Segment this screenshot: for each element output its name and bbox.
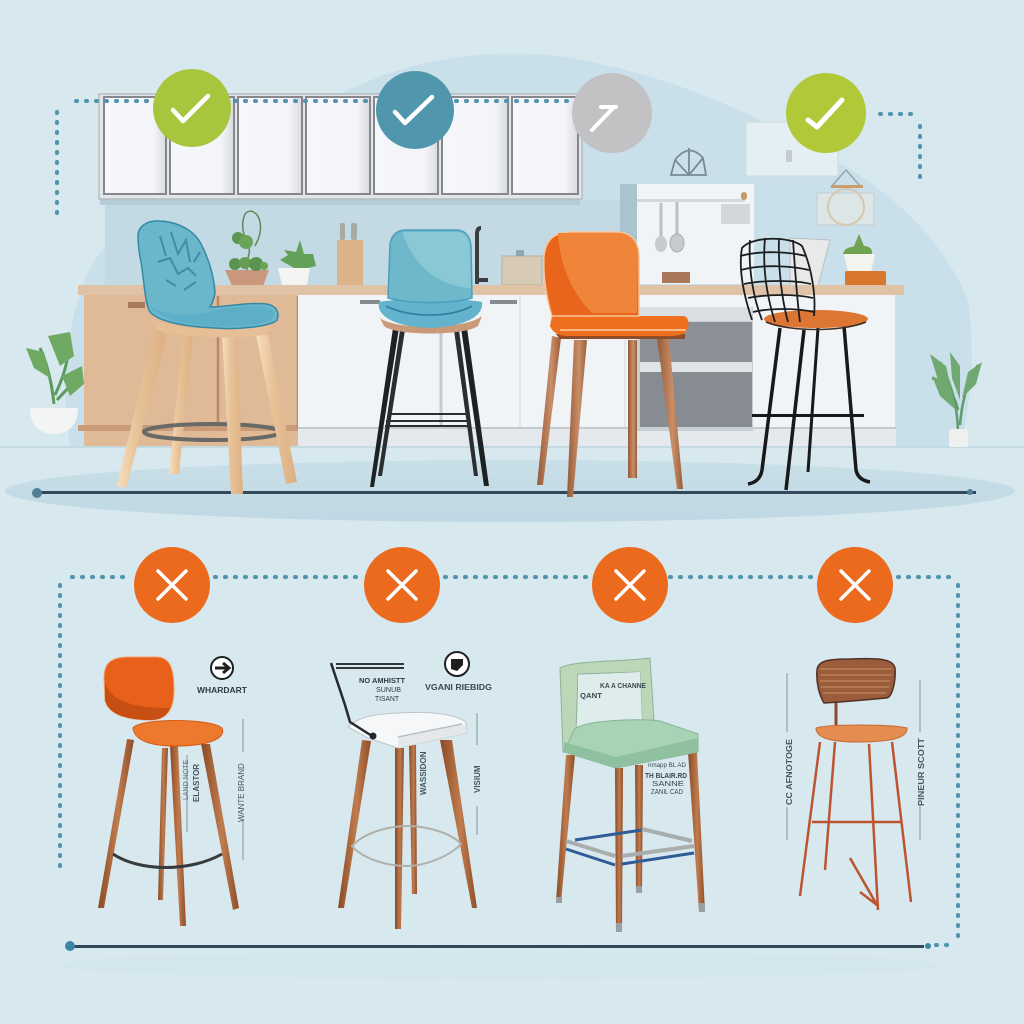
plant pot right — [843, 234, 886, 286]
lower stool 1: orange — [98, 657, 247, 926]
counter items — [225, 211, 886, 286]
backsplash appliance tower — [620, 184, 754, 284]
shell — [138, 221, 278, 329]
seat — [764, 310, 868, 328]
icon: grey arrow — [572, 73, 652, 153]
seat — [556, 334, 685, 339]
side label: LAND NOTE — [183, 760, 190, 800]
stool 3: orange wooden — [537, 232, 688, 497]
stool 1: blue wood — [117, 221, 297, 494]
dimension lines — [787, 673, 920, 840]
icon: orange cross 1 — [134, 547, 210, 623]
note: KA A CHANNE — [600, 683, 646, 690]
back pattern — [158, 232, 200, 290]
stool 2: blue black legs — [370, 230, 489, 487]
note: QANT — [580, 693, 603, 700]
floor ellipse shadow — [5, 460, 1015, 522]
newspaper behind wire chair — [790, 238, 830, 286]
lower dotted frame — [60, 577, 958, 945]
wall decor: hanging frame — [817, 170, 874, 225]
side label: ELASTOR — [192, 764, 201, 802]
wall backdrop shape — [66, 54, 972, 446]
floor line upper — [32, 488, 976, 498]
countertop — [78, 285, 904, 295]
side label: WASSIDON — [419, 751, 428, 795]
lower stool 2: white — [331, 652, 492, 929]
seat — [564, 720, 698, 768]
seat — [380, 316, 482, 334]
legs — [117, 326, 166, 488]
seat top — [150, 306, 274, 326]
icon: green check 1 — [153, 69, 231, 147]
label: VGANI RIEBIDG — [425, 683, 492, 692]
wall cabinets — [99, 94, 582, 205]
label: WHARDART — [197, 686, 247, 695]
backrest — [388, 230, 472, 302]
dimension lines — [187, 719, 243, 860]
icon: orange cross 2 — [364, 547, 440, 623]
note: TH BLAIR.RD — [645, 773, 687, 780]
container — [502, 250, 542, 285]
note: SANNE — [652, 781, 684, 788]
seat base — [150, 318, 273, 337]
plant left — [26, 332, 84, 434]
knife block — [337, 223, 363, 285]
side label: PINEUR SCOTT — [917, 738, 926, 806]
stool 4: wire — [740, 238, 870, 490]
wire back — [331, 663, 372, 736]
side label: VISIUM — [473, 765, 482, 793]
base cabinets — [78, 294, 896, 446]
note: ZANIL CAD — [651, 789, 683, 796]
icon: teal check — [376, 71, 454, 149]
dimension line — [476, 713, 478, 835]
wire back — [740, 238, 814, 322]
seat — [133, 720, 223, 746]
side label: CC AFNOTOGE — [785, 738, 794, 805]
plant right — [930, 352, 982, 447]
back opening — [578, 672, 642, 728]
back — [817, 659, 895, 703]
icon: orange cross 4 — [817, 547, 893, 623]
wall panel with hook — [746, 122, 838, 176]
seat — [816, 725, 907, 742]
note: TISANT — [375, 696, 400, 703]
side label: WANTE BRAND — [237, 763, 246, 822]
lower stool 3: green — [556, 658, 705, 932]
back frame — [560, 658, 654, 752]
wall panel behind counter — [105, 200, 625, 286]
lower stool 4: slatted — [785, 659, 926, 910]
wall decor: clock ornament — [671, 148, 706, 175]
plant pot left — [225, 211, 269, 286]
faucet — [477, 228, 488, 284]
back — [104, 657, 174, 720]
oven — [637, 307, 753, 431]
plant pot middle — [278, 240, 316, 285]
note: SUNUB — [376, 687, 401, 694]
note: nmapp BL AD — [648, 762, 686, 769]
icon: green check 2 — [786, 73, 866, 153]
lower floor glow — [60, 951, 940, 979]
floor line lower — [65, 941, 931, 951]
icon: shield badge — [445, 652, 469, 676]
icon: orange cross 3 — [592, 547, 668, 623]
icon: arrow badge — [211, 657, 233, 679]
note: NO AMHISTT — [359, 678, 406, 685]
backrest — [544, 232, 639, 316]
seat — [348, 712, 467, 748]
upper dotted frame — [57, 101, 920, 222]
